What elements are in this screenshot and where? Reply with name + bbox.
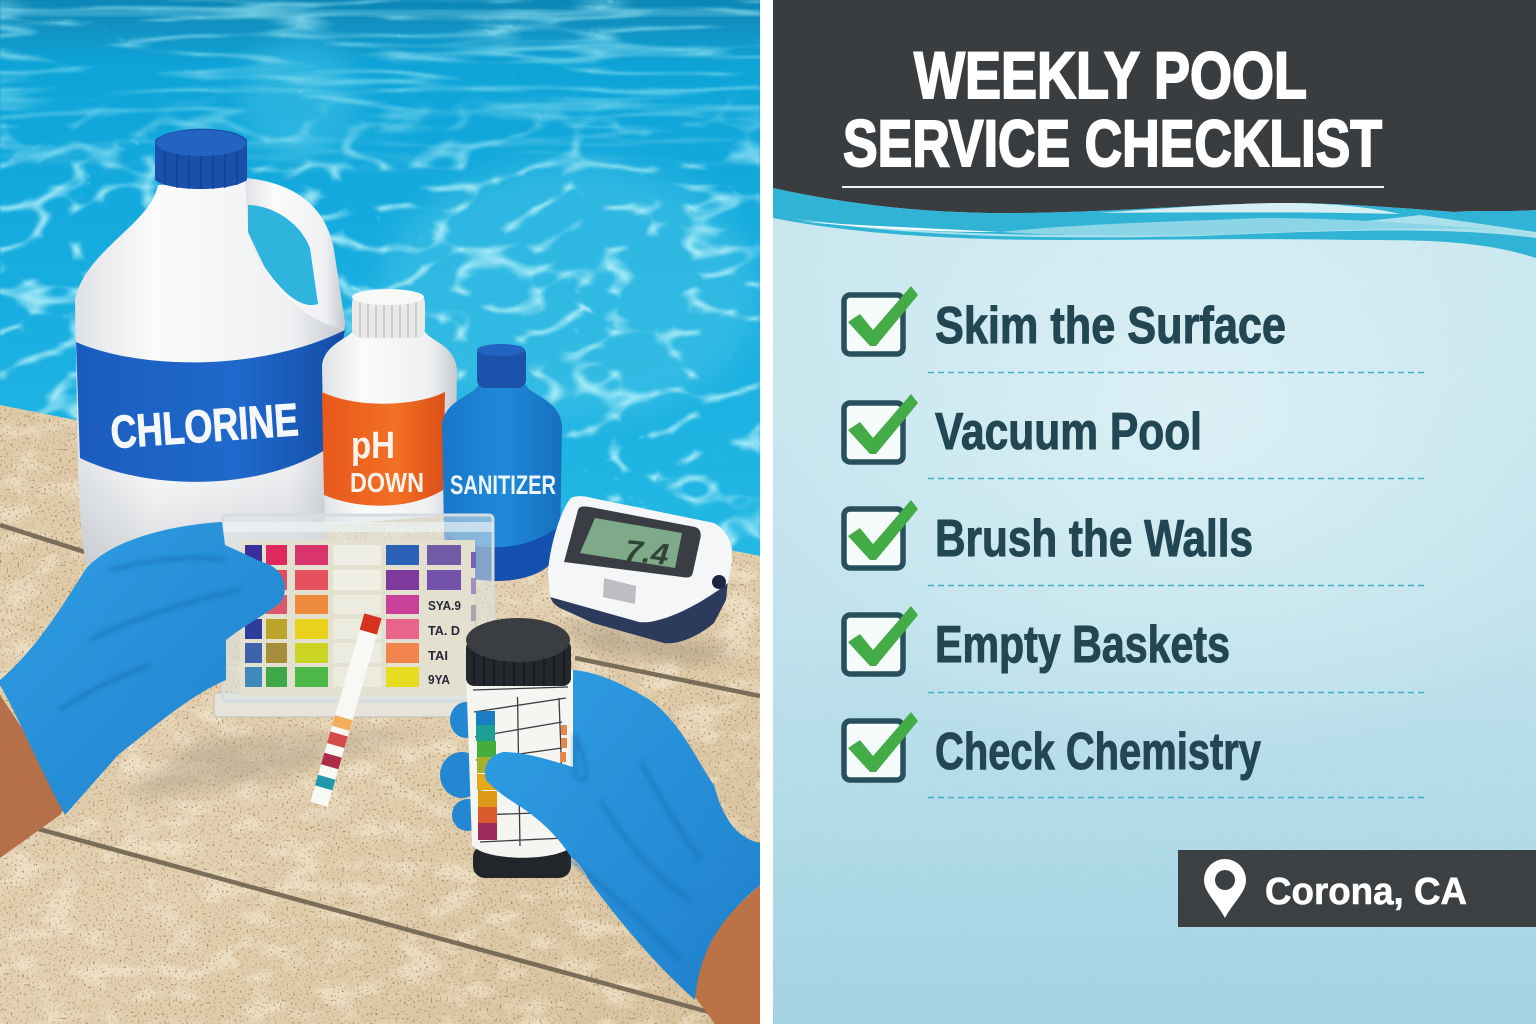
left gloved hand <box>0 522 285 815</box>
test kit labels <box>428 598 461 687</box>
left arm skin <box>0 695 70 858</box>
icon: map pin <box>1204 859 1246 918</box>
stone deck <box>0 400 760 1024</box>
title <box>843 38 1382 180</box>
checklist item: check chemistry: Check Chemistry <box>935 723 1261 781</box>
checklist item: check chemistry <box>844 712 1261 781</box>
down label text: DOWN <box>350 467 424 498</box>
teal wave <box>773 188 1536 258</box>
right arm skin <box>690 885 760 1024</box>
panel: pool photo <box>0 0 760 1024</box>
digital pH meter <box>548 496 732 643</box>
title: SERVICE CHECKLIST <box>843 106 1382 180</box>
test strip <box>310 613 382 807</box>
left fingers behind vial <box>440 702 472 831</box>
location tag: Corona, CA <box>1265 871 1467 913</box>
test kit labels: TA. D <box>428 623 460 638</box>
test kit labels: TAI <box>428 648 448 663</box>
pool water <box>0 0 760 570</box>
chlorine bottle <box>75 129 345 582</box>
sanitizer label text: SANITIZER <box>450 470 556 500</box>
dark title header <box>773 0 1536 213</box>
checklist item: vacuum pool <box>844 394 1202 462</box>
test strip vial <box>466 618 573 878</box>
test kit labels: 9YA <box>428 672 451 687</box>
meter reading: 7.4 <box>623 535 671 572</box>
test kit card <box>214 515 493 717</box>
location tag <box>1178 850 1536 927</box>
title: WEEKLY POOL <box>914 38 1307 112</box>
checklist item: brush the walls: Brush the Walls <box>935 510 1253 568</box>
pH label text: pH <box>351 425 395 467</box>
checklist item: empty baskets: Empty Baskets <box>935 616 1230 674</box>
checklist item: skim the surface: Skim the Surface <box>935 297 1286 355</box>
sanitizer bottle <box>442 344 562 581</box>
chlorine label text: CHLORINE <box>109 393 300 458</box>
checklist item: empty baskets <box>844 606 1230 674</box>
panel: checklist <box>773 0 1536 1024</box>
pH down bottle <box>322 289 457 525</box>
checklist item: brush the walls <box>844 500 1253 568</box>
checklist item: vacuum pool: Vacuum Pool <box>935 403 1202 461</box>
test kit labels: SYA.9 <box>428 598 461 613</box>
right gloved hand <box>485 670 760 1000</box>
checklist item: skim the surface <box>844 286 1286 355</box>
